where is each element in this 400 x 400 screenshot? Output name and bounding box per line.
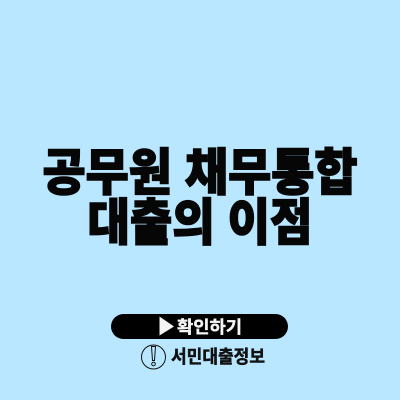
icon: exclamation in circle	[142, 345, 166, 369]
icon: play triangle	[160, 316, 174, 336]
title line 1: 공무원 채무통합	[42, 145, 358, 201]
button label: 확인하기	[177, 318, 242, 337]
title	[42, 145, 358, 251]
button pill	[111, 314, 288, 339]
button: confirm	[111, 314, 288, 339]
brand logo	[142, 345, 265, 369]
brand name: 서민대출정보	[171, 347, 265, 367]
title line 2: 대출의 이점	[88, 195, 312, 251]
